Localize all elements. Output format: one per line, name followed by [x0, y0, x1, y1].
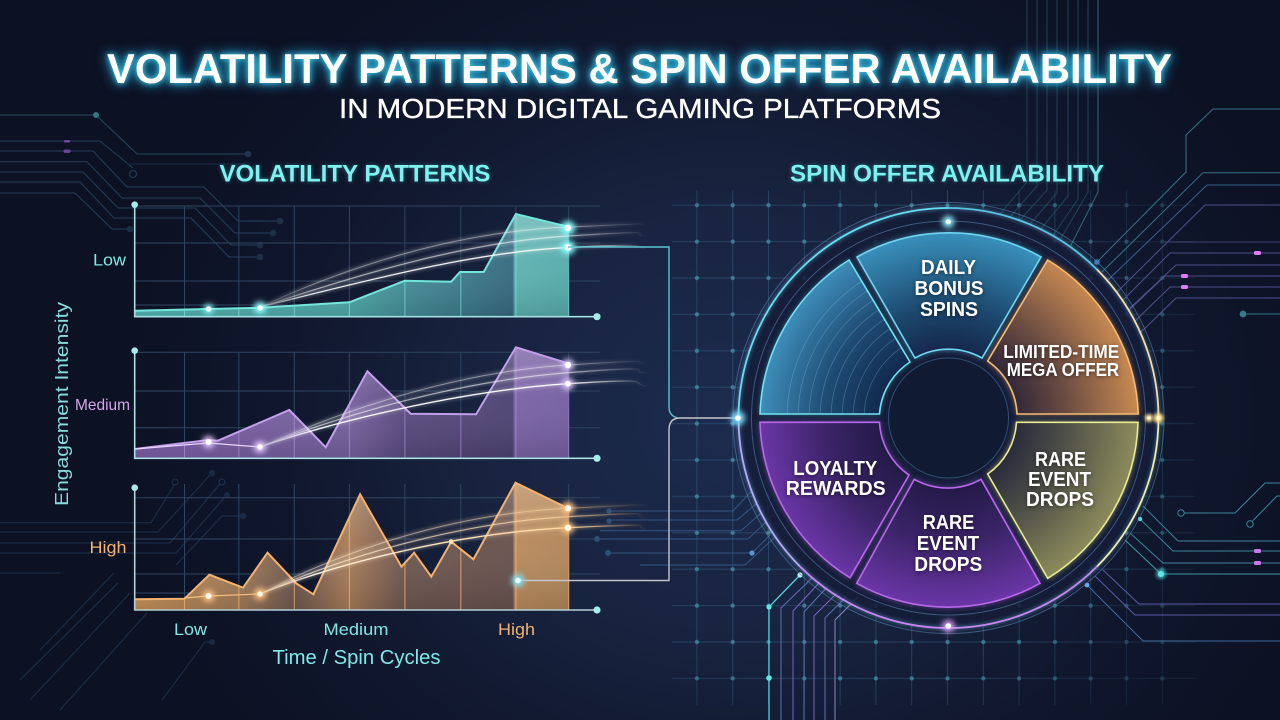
- circuit traces: right upper: [1094, 109, 1280, 336]
- circuit traces: top left: [0, 112, 283, 260]
- segment: limited-time mega offer: LIMITED-TIME: [1003, 342, 1119, 362]
- circuit traces: right lower: [1085, 483, 1280, 641]
- heading: spin offer availability: SPIN OFFER AVAILABILITY: [790, 160, 1104, 188]
- segment: rare event drops bottom: EVENT: [917, 533, 979, 555]
- segment: rare event drops right: EVENT: [1028, 469, 1091, 491]
- background dot grid: [672, 190, 1195, 705]
- segment: rare event drops bottom: [857, 479, 1040, 607]
- segment: daily bonus spins: [857, 233, 1041, 358]
- row label: high: High: [90, 538, 126, 557]
- chart: medium volatility: [131, 347, 648, 462]
- segment: loyalty rewards: LOYALTY: [793, 458, 878, 480]
- row label: medium: Medium: [75, 397, 130, 414]
- segment: daily bonus spins: DAILY: [921, 257, 977, 279]
- segment: loyalty rewards: [760, 422, 909, 578]
- chart: high volatility: [131, 483, 648, 614]
- segment: rare event drops right: [988, 422, 1138, 578]
- circuit traces: top right verticals: [1000, 0, 1098, 247]
- outer rings: [733, 202, 1164, 634]
- segment: rare event drops right: DROPS: [1026, 489, 1094, 511]
- chart: low volatility: [131, 201, 648, 320]
- x axis title: Time / Spin Cycles: [272, 647, 440, 669]
- axis title: engagement intensity: Engagement Intensity: [52, 302, 72, 506]
- circuit traces: wheel lower left: [594, 484, 788, 565]
- axes: [135, 351, 597, 458]
- area: medium: [135, 347, 569, 458]
- markers: [203, 502, 574, 602]
- segment: daily bonus spins: SPINS: [920, 299, 978, 321]
- circuit traces: bottom left: [0, 470, 246, 710]
- magenta indicator pills: [1156, 251, 1261, 579]
- segment: limited-time mega offer: MEGA OFFER: [1007, 360, 1119, 380]
- segment: loyalty rewards: REWARDS: [786, 478, 886, 500]
- connector arrows: charts to wheel: [512, 247, 738, 586]
- axes: [135, 205, 597, 317]
- segment: limited-time mega offer: [988, 260, 1138, 414]
- axes: [135, 488, 597, 610]
- center hub: [888, 358, 1008, 478]
- segment: daily bonus spins: BONUS: [914, 278, 984, 300]
- x tick label: high: High: [498, 620, 535, 639]
- area: low: [135, 214, 569, 317]
- trend curves: [260, 224, 648, 307]
- segment: rare event drops right: RARE: [1035, 449, 1086, 471]
- segment: rare event drops bottom: RARE: [923, 512, 974, 534]
- spin offer wheel: [731, 202, 1164, 634]
- circuit traces: wheel bottom: [766, 572, 858, 720]
- x tick label: medium: Medium: [324, 620, 388, 639]
- x tick label: low: Low: [174, 620, 208, 639]
- trend curves: [184, 505, 648, 598]
- markers: [203, 359, 574, 453]
- trend curves: [135, 361, 648, 449]
- area: high: [135, 483, 569, 610]
- segment: blank cyan: [756, 258, 912, 418]
- ring glow nodes: [731, 216, 1164, 632]
- subtitle: IN MODERN DIGITAL GAMING PLATFORMS: [339, 93, 941, 124]
- title: VOLATILITY PATTERNS & SPIN OFFER AVAILABILITY: [107, 45, 1172, 92]
- markers: [204, 221, 575, 314]
- heading: volatility patterns: VOLATILITY PATTERNS: [220, 160, 491, 188]
- segment: rare event drops bottom: DROPS: [914, 554, 982, 576]
- row label: low: Low: [93, 250, 127, 270]
